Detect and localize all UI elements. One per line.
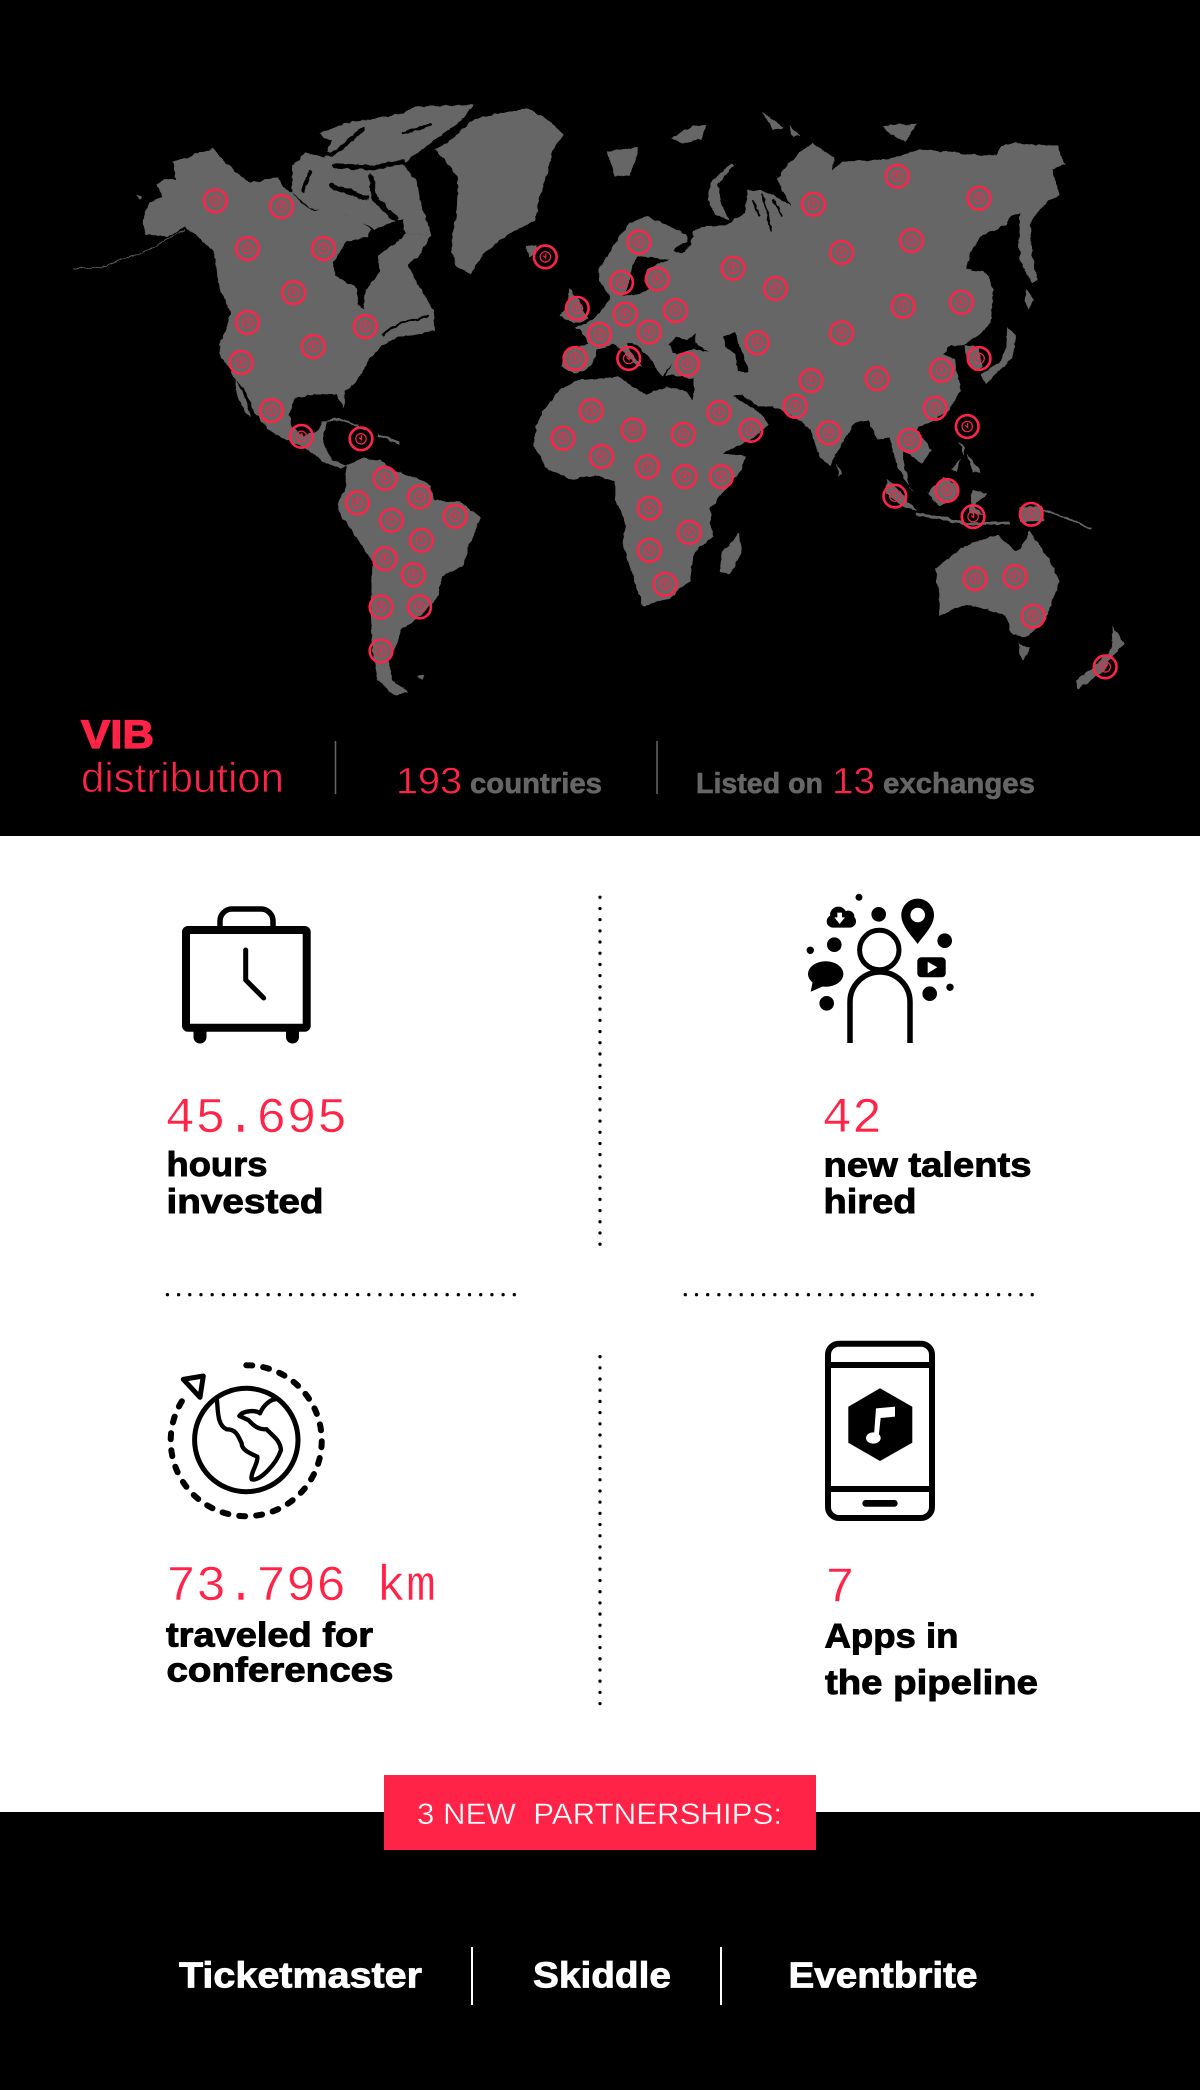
panel: traveled for conferences	[166, 1365, 436, 1690]
label: traveled for	[166, 1617, 373, 1655]
map: Americas and Greenland	[74, 104, 564, 696]
partnerships badge: 3 NEW PARTNERSHIPS:	[417, 1798, 782, 1831]
label: the pipeline	[825, 1664, 1038, 1702]
label	[166, 1146, 324, 1221]
stat: 193 countries: 193	[396, 760, 462, 802]
map: arctic channels and St Lawrence	[303, 125, 431, 335]
icon: suitcase clock	[186, 909, 307, 1044]
label	[824, 1617, 1038, 1702]
label	[166, 1617, 394, 1690]
stat: 193 countries	[396, 760, 602, 802]
title: VIB distribution: VIB	[81, 713, 154, 757]
map: Canadian arctic archipelago	[292, 104, 474, 235]
panel: new talents hired	[807, 894, 1032, 1221]
map: Eurasia, Africa, Oceania	[534, 112, 1125, 689]
label: Apps in	[824, 1617, 958, 1655]
partnerships badge	[384, 1775, 816, 1850]
label	[824, 1147, 1032, 1221]
partner: Ticketmaster: Ticketmaster	[179, 1955, 422, 1996]
map distribution markers	[204, 165, 1116, 678]
label: hired	[824, 1183, 916, 1221]
stat: listed on 13 exchanges: exchanges	[883, 768, 1035, 800]
stat: 193 countries: countries	[470, 768, 602, 800]
panel: partnerships footer	[0, 1812, 1200, 2090]
title: VIB distribution: distribution	[81, 754, 284, 801]
partner: Skiddle: Skiddle	[533, 1955, 671, 1996]
label: invested	[166, 1183, 324, 1221]
stat: listed on 13 exchanges	[696, 760, 1035, 802]
stat: listed on 13 exchanges: 13	[832, 760, 875, 802]
icon: globe with orbit arrow	[171, 1365, 322, 1516]
title: VIB distribution	[81, 713, 284, 801]
panel: map background	[0, 0, 1200, 836]
label: hours	[166, 1146, 268, 1184]
number: 7	[825, 1561, 855, 1618]
stat: listed on 13 exchanges: Listed on	[696, 768, 823, 800]
panel: hours invested	[165, 909, 347, 1221]
number: 73.796 km	[166, 1559, 436, 1616]
label: new talents	[824, 1147, 1032, 1185]
map: inland seas	[624, 194, 783, 372]
number: 45.695	[165, 1091, 347, 1148]
icon: person with social bubbles	[807, 894, 954, 1043]
label: conferences	[166, 1652, 394, 1690]
icon: phone with music app	[828, 1344, 932, 1518]
world map	[74, 104, 1125, 696]
partner: Eventbrite: Eventbrite	[788, 1955, 978, 1996]
number: 42	[822, 1091, 882, 1148]
panel: apps in the pipeline	[824, 1344, 1038, 1702]
